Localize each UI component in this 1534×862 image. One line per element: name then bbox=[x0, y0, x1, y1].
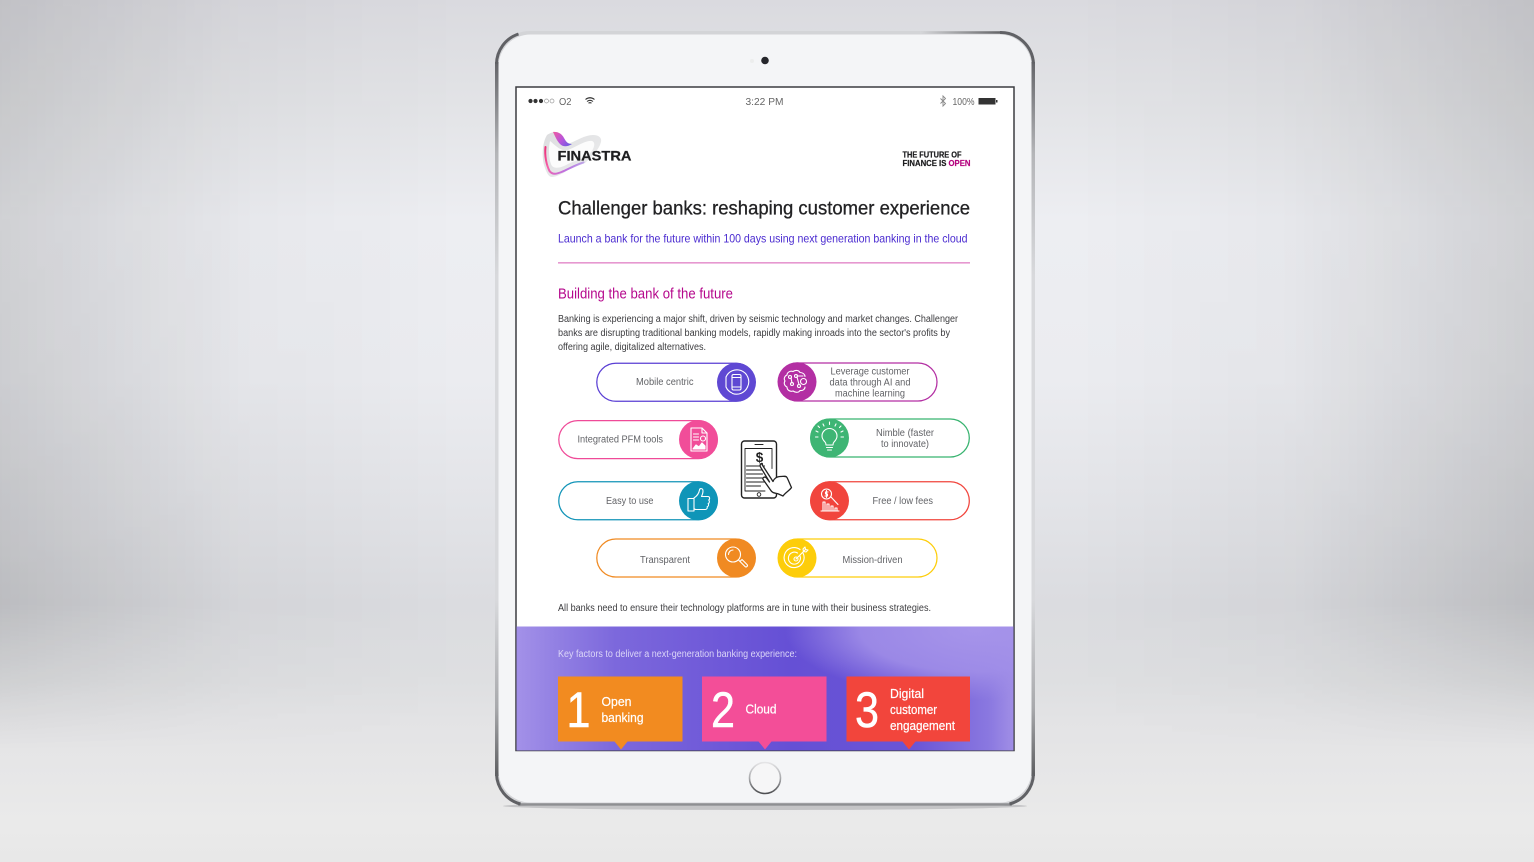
battery percent: 100% bbox=[952, 97, 975, 108]
card 2: cloud bbox=[702, 676, 826, 750]
intro paragraph: Banking is experiencing a major shift, driven by seismic technology and market changes. Challenger bbox=[558, 314, 959, 325]
icon: AI brain bbox=[778, 362, 816, 401]
intro paragraph bbox=[558, 314, 959, 353]
pill: Mobile centric bbox=[597, 363, 756, 402]
pill: Free / low fees: Free / low fees bbox=[872, 496, 933, 507]
pill: Integrated PFM tools: Integrated PFM tools bbox=[578, 434, 663, 446]
subtitle: Launch a bank for the future within 100 days using next generation banking in the cloud bbox=[558, 232, 968, 246]
screen bbox=[516, 87, 1014, 750]
card 2: cloud: 2 bbox=[711, 682, 735, 738]
card 1: open banking: Open bbox=[602, 695, 632, 709]
pill: Nimble bbox=[810, 418, 969, 458]
logo wordmark: FINASTRA bbox=[558, 148, 632, 164]
carrier: O2 bbox=[559, 97, 572, 108]
icon: thumbs up bbox=[679, 481, 718, 520]
icon: magnifier bbox=[717, 538, 756, 578]
pill: Free / low fees bbox=[810, 481, 969, 520]
panel: key factors bbox=[516, 626, 1014, 750]
intro paragraph: banks are disrupting traditional banking models, rapidly making inroads into the sector's profits by bbox=[558, 328, 950, 339]
pill: Leverage customer data: Leverage customer bbox=[830, 366, 910, 378]
bluetooth icon bbox=[940, 96, 946, 106]
icon: tablet with hand bbox=[742, 441, 792, 498]
battery icon bbox=[978, 98, 998, 104]
icon: report bbox=[679, 420, 718, 459]
section heading: Building the bank of the future bbox=[558, 286, 733, 302]
pill: Transparent bbox=[597, 538, 756, 578]
icon: phone rotate bbox=[717, 363, 756, 402]
icon: target bbox=[778, 538, 816, 578]
logo: Finastra bbox=[543, 132, 632, 177]
card 1: open banking: 1 bbox=[566, 682, 590, 738]
pill: Leverage customer data: machine learning bbox=[835, 388, 905, 400]
card 3: digital customer engagement: Digital bbox=[890, 687, 924, 701]
card 2: cloud: Cloud bbox=[746, 702, 777, 716]
tagline bbox=[902, 150, 971, 168]
signal dots bbox=[528, 99, 554, 103]
pill: Nimble: Nimble (faster bbox=[876, 428, 935, 439]
pill: Mission-driven bbox=[778, 538, 937, 578]
tagline: THE FUTURE OF bbox=[902, 150, 962, 160]
pill: Leverage customer data: data through AI and bbox=[830, 378, 910, 388]
time: 3:22 PM bbox=[746, 97, 784, 108]
pill: Nimble: to innovate) bbox=[881, 439, 929, 450]
dollar sign: $ bbox=[756, 450, 764, 465]
pill: Mobile centric: Mobile centric bbox=[636, 377, 694, 388]
tagline: FINANCE IS OPEN bbox=[902, 159, 971, 168]
intro paragraph: offering agile, digitalized alternatives. bbox=[558, 342, 706, 353]
pill: Easy to use bbox=[559, 481, 718, 520]
title: Challenger banks: reshaping customer experience bbox=[558, 198, 970, 220]
pill: Easy to use: Easy to use bbox=[606, 496, 654, 507]
pill: Mission-driven: Mission-driven bbox=[842, 555, 902, 566]
pill: Transparent: Transparent bbox=[640, 555, 690, 566]
pill: Integrated PFM tools bbox=[559, 420, 718, 459]
card 3: digital customer engagement: 3 bbox=[855, 682, 879, 738]
pill: Leverage customer data bbox=[778, 362, 937, 401]
card 3: digital customer engagement bbox=[846, 676, 970, 750]
panel heading: Key factors to deliver a next-generation banking experience: bbox=[558, 649, 797, 660]
icon: falling fee chart bbox=[810, 481, 849, 520]
camera bbox=[750, 57, 769, 64]
closing sentence: All banks need to ensure their technology platforms are in tune with their business strategies. bbox=[558, 603, 931, 614]
card 1: open banking: banking bbox=[602, 711, 644, 725]
home button bbox=[750, 762, 780, 794]
card 3: digital customer engagement: engagement bbox=[890, 719, 955, 733]
icon: light bulb bbox=[810, 418, 849, 458]
tablet device bbox=[495, 31, 1035, 810]
card 1: open banking bbox=[558, 676, 682, 750]
status bar bbox=[528, 96, 998, 108]
wifi icon bbox=[586, 98, 594, 103]
card 3: digital customer engagement: customer bbox=[890, 703, 937, 717]
